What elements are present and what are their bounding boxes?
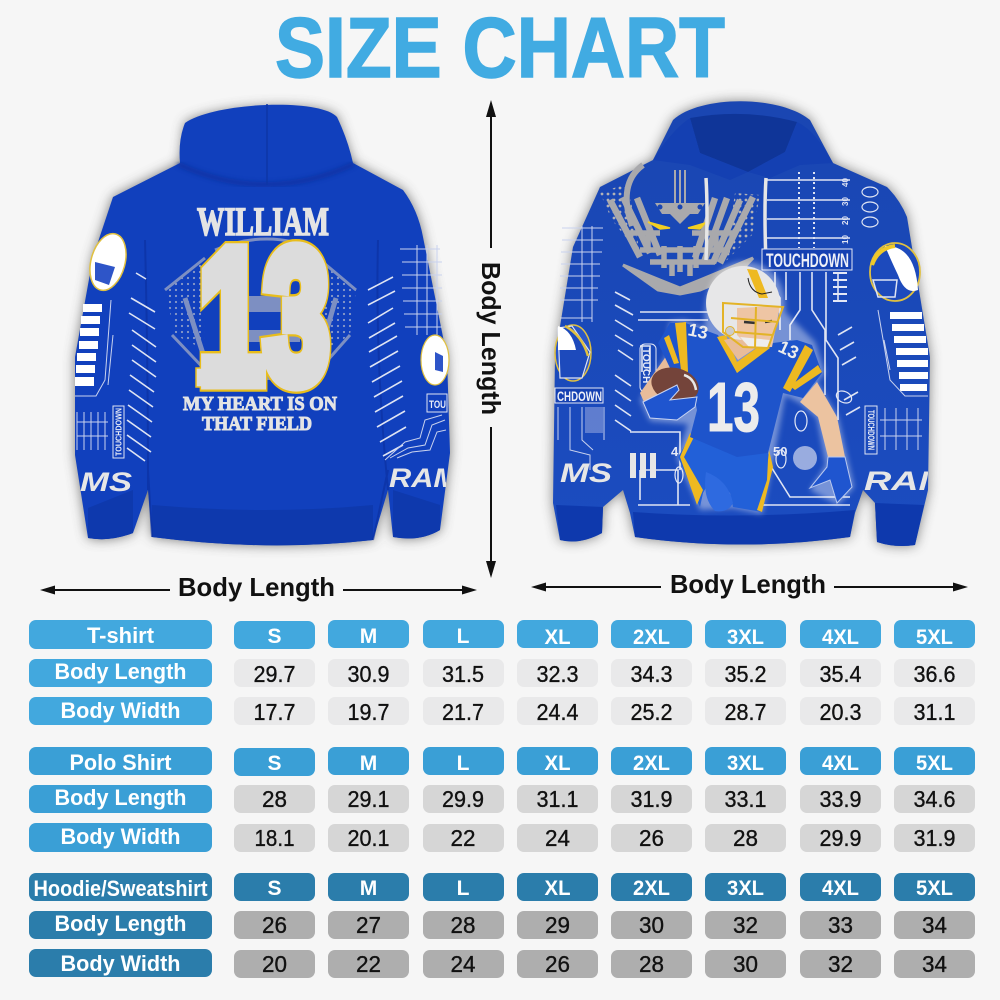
right glove	[810, 457, 852, 503]
hoodie body length row: 30	[639, 912, 664, 938]
t-shirt body length row: 31.5	[442, 661, 484, 687]
polo size row: Polo Shirt	[70, 750, 172, 775]
right sleeve graphics: RAM	[864, 466, 951, 496]
polo body width row: 18.1	[254, 825, 294, 851]
t-shirt body width row: 21.7	[442, 699, 484, 725]
hoodie size row: M	[360, 877, 377, 900]
t-shirt body width row: 28.7	[724, 699, 766, 725]
t-shirt body length row: 34.3	[630, 661, 672, 687]
left sleeve graphics: CHDOWN	[557, 389, 602, 404]
player illustration: 13	[775, 336, 802, 363]
hoodie body width row: 26	[545, 951, 570, 977]
hoodie size row: 3XL	[727, 877, 764, 900]
slogan: MY HEART IS ON	[183, 393, 338, 415]
hoodie body width row: 28	[639, 951, 664, 977]
right sleeve graphics	[368, 245, 450, 487]
polo body length row	[29, 785, 975, 813]
hoodie size row: 2XL	[633, 877, 670, 900]
left sleeve graphics	[555, 226, 656, 488]
hem and cuffs	[88, 490, 440, 545]
polo body width row: 31.9	[914, 825, 956, 851]
hoodie body width row: 34	[922, 951, 947, 977]
t-shirt body width row: 25.2	[630, 699, 672, 725]
pants	[678, 437, 772, 512]
arrow: right horizontal dimension with label	[531, 569, 968, 599]
helmet facemask graphic	[600, 165, 760, 294]
t-shirt body width row: 31.1	[914, 699, 956, 725]
hoodie size row: XL	[544, 877, 571, 900]
polo size row: S	[267, 752, 282, 775]
helmet	[706, 266, 780, 340]
panel: polo shirt size table	[29, 747, 975, 852]
polo body length row: 34.6	[914, 786, 956, 812]
jersey	[658, 322, 822, 457]
left sleeve graphics: MS	[560, 458, 612, 488]
t-shirt size row: 3XL	[727, 626, 764, 649]
circuit lines: 4	[671, 444, 679, 459]
polo body length row: Body Length	[54, 785, 186, 810]
t-shirt body width row: 20.3	[820, 699, 862, 725]
t-shirt size row: S	[267, 625, 282, 648]
player illustration	[640, 262, 854, 514]
circuit lines	[615, 272, 860, 505]
polo body width row: 26	[639, 825, 664, 851]
polo body length row: 28	[262, 786, 287, 812]
t-shirt size row: M	[360, 625, 377, 648]
t-shirt body width row	[29, 697, 975, 725]
hoodie body length row: 32	[733, 912, 758, 938]
polo body width row: 24	[545, 825, 570, 851]
field graphic: 10	[841, 235, 850, 244]
t-shirt body length row: Body Length	[54, 659, 186, 684]
polo size row: 5XL	[916, 752, 953, 775]
hoodie body width row: 32	[828, 951, 853, 977]
hoodie body width row: 30	[733, 951, 758, 977]
hoodie body width row: 20	[262, 951, 287, 977]
hood interior	[690, 114, 797, 172]
polo body width row	[29, 823, 975, 852]
polo body length row: 31.9	[630, 786, 672, 812]
right sleeve graphics	[864, 242, 928, 490]
hoodie size row	[29, 873, 975, 901]
hoodie body width row: Body Width	[60, 951, 180, 976]
arms	[640, 355, 686, 402]
polo body width row: 29.9	[820, 825, 862, 851]
polo body length row: 29.9	[442, 786, 484, 812]
hoodie size row: Hoodie/Sweatshirt	[34, 876, 208, 901]
right sleeve graphics: TOU	[429, 399, 446, 411]
polo size row	[29, 747, 975, 776]
right sleeve graphics: RAM	[389, 463, 460, 493]
t-shirt body width row: 17.7	[254, 699, 296, 725]
polo body length row: 33.1	[724, 786, 766, 812]
t-shirt body length row: 36.6	[914, 661, 956, 687]
emblem behind number	[165, 239, 356, 380]
hoodie size row: 5XL	[916, 877, 953, 900]
left sleeve graphics: MS	[80, 467, 132, 497]
hem and cuffs	[556, 503, 924, 546]
hoodie size row: 4XL	[822, 877, 859, 900]
t-shirt body length row: 29.7	[254, 661, 296, 687]
player illustration: 13	[686, 319, 710, 343]
t-shirt body length row: 32.3	[536, 661, 578, 687]
t-shirt body length row: 35.2	[724, 661, 766, 687]
polo body width row: 22	[450, 825, 476, 851]
left sleeve graphics	[75, 230, 156, 497]
number 13: 13	[199, 211, 329, 421]
face	[737, 306, 780, 348]
touchdown badge: TOUCHDOWN	[766, 251, 849, 272]
left glove	[643, 385, 697, 420]
t-shirt body width row: 24.4	[536, 699, 579, 725]
panel: hoodie and sweatshirt size table	[29, 873, 975, 978]
t-shirt size row: T-shirt	[87, 623, 155, 648]
hoodie body length row: 28	[450, 912, 476, 938]
t-shirt body width row: Body Width	[60, 698, 180, 723]
hoodie size row: L	[457, 877, 470, 900]
hoodie size row: S	[267, 877, 282, 900]
football	[647, 362, 703, 408]
polo body length row: 31.1	[536, 786, 578, 812]
hoodie body length row: 33	[828, 912, 853, 938]
t-shirt body length row	[29, 659, 975, 687]
slogan	[183, 393, 338, 435]
back view hoodie	[75, 104, 460, 545]
polo size row: L	[457, 752, 470, 775]
drawstrings	[706, 178, 766, 262]
field graphic: 40	[841, 178, 850, 187]
t-shirt size row: 5XL	[916, 626, 953, 649]
polo body length row: 33.9	[820, 786, 862, 812]
hoodie body width row	[29, 949, 975, 978]
front view hoodie	[553, 101, 951, 546]
t-shirt size row	[29, 620, 975, 649]
hoodie body length row: 26	[262, 912, 287, 938]
t-shirt body length row: 30.9	[348, 661, 390, 687]
hoodie body length row	[29, 911, 975, 939]
polo size row: M	[360, 752, 377, 775]
back hoodie body	[75, 105, 450, 545]
arrow: left horizontal dimension with label	[40, 572, 477, 602]
front hoodie body	[553, 101, 930, 546]
number 13: 13	[199, 211, 329, 421]
t-shirt body width row: 19.7	[348, 699, 390, 725]
t-shirt body length row: 35.4	[820, 661, 862, 687]
jersey numbers: 13	[707, 368, 760, 446]
hoodie body length row: 29	[545, 912, 570, 938]
hoodie body length row: 27	[356, 912, 381, 938]
field graphic: 30	[841, 197, 850, 206]
hoodie body length row: 34	[922, 912, 947, 938]
right sleeve graphics: TOUCHDOWN	[866, 410, 876, 450]
polo size row: XL	[544, 752, 571, 775]
polo size row: 4XL	[822, 752, 859, 775]
field graphic: 20	[841, 216, 850, 225]
polo size row: 3XL	[727, 752, 764, 775]
slogan: THAT FIELD	[202, 413, 312, 435]
t-shirt size row: XL	[544, 626, 571, 649]
hoodie body length row: Body Length	[54, 911, 186, 936]
polo body width row: 28	[733, 825, 758, 851]
field graphic	[767, 172, 878, 248]
polo body width row: 20.1	[348, 825, 390, 851]
arrow: vertical dimension with label: Body Length	[476, 262, 506, 415]
face mask	[723, 303, 783, 348]
polo size row: 2XL	[633, 752, 670, 775]
title: SIZE CHART	[275, 1, 725, 96]
hoodie body width row: 24	[450, 951, 476, 977]
t-shirt size row: 4XL	[822, 626, 859, 649]
circuit lines: TOUCH	[640, 348, 651, 383]
panel: t-shirt size table	[29, 620, 975, 725]
left sleeve graphics: TOUCHDOWN	[114, 408, 124, 456]
arrow: right horizontal dimension with label: Body Length	[670, 569, 826, 599]
polo body width row: Body Width	[60, 824, 180, 849]
name: WILLIAM	[197, 199, 329, 244]
t-shirt size row: 2XL	[633, 626, 670, 649]
polo body length row: 29.1	[348, 786, 390, 812]
hoodie body width row: 22	[356, 951, 381, 977]
arrow: left horizontal dimension with label: Body Length	[178, 572, 335, 602]
circuit lines: 50	[773, 444, 787, 459]
touchdown badge	[762, 249, 852, 272]
hood shading	[178, 164, 354, 184]
t-shirt size row: L	[457, 625, 470, 648]
arrow: vertical dimension with label	[476, 100, 506, 578]
